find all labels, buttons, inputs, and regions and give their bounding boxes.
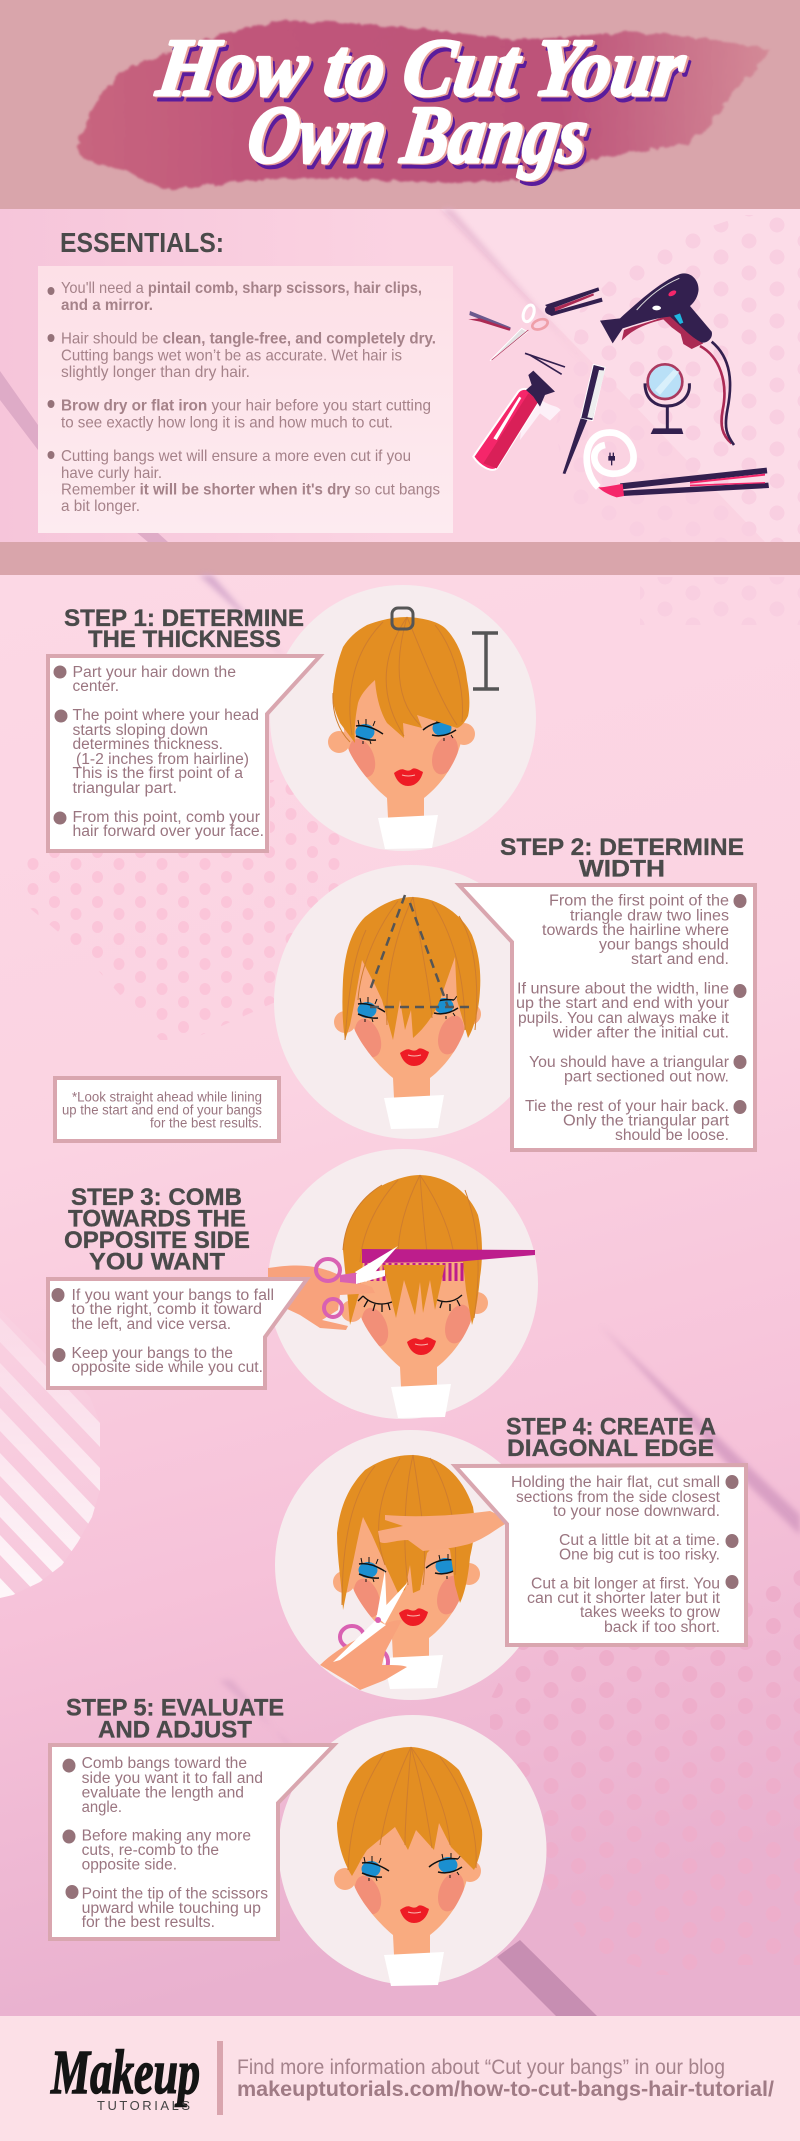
heading: step 3: YOU WANT bbox=[89, 1249, 225, 1276]
note: look straight ahead: up the start and end of your bangs bbox=[62, 1102, 262, 1118]
illustration: face, holding hand and scissors bbox=[320, 1455, 505, 1690]
bullet: hair condition: slightly longer than dry hair. bbox=[61, 364, 250, 381]
heading: step 4: DIAGONAL EDGE bbox=[507, 1435, 714, 1462]
hand holding scissors bbox=[268, 1265, 375, 1330]
bullet: brow dry bbox=[48, 398, 431, 432]
callout: step 4: Holding the hair flat, cut small bbox=[511, 1474, 720, 1491]
callout: step 5: cuts, re-comb to the bbox=[82, 1842, 219, 1859]
footer text bbox=[237, 2056, 774, 2101]
heading: step 5 bbox=[66, 1695, 284, 1744]
hair cap bbox=[343, 1175, 482, 1325]
panel: essentials list bbox=[38, 266, 453, 533]
heading: step 2: STEP 2: DETERMINE bbox=[500, 834, 744, 861]
callout: step 1: center. bbox=[72, 678, 119, 695]
callout: step 5: upward while touching up bbox=[82, 1900, 261, 1917]
callout: step 4: Cut a bit longer at first. You bbox=[531, 1575, 720, 1592]
callout: step 1: Part your hair down the bbox=[72, 664, 236, 681]
heading: step 1: STEP 1: DETERMINE bbox=[64, 605, 304, 632]
bullet: curly hair: a bit longer. bbox=[61, 498, 140, 515]
icon: flat iron bbox=[598, 468, 769, 497]
heading: step 1: THE THICKNESS bbox=[88, 626, 281, 653]
callout: step 1 bbox=[48, 656, 320, 851]
callout: step 4: to your nose downward. bbox=[553, 1503, 720, 1520]
heading: step 5: AND ADJUST bbox=[98, 1717, 252, 1744]
bullet: tools needed: and a mirror. bbox=[61, 297, 153, 314]
callout: step 1: determines thickness. bbox=[72, 736, 223, 753]
backdrop circle bbox=[268, 1149, 538, 1419]
bullet: brow dry: Brow dry or flat iron your hair before you start cutting bbox=[61, 398, 431, 414]
callout: step 2: part sectioned out now. bbox=[564, 1069, 729, 1086]
note: look straight ahead: *Look straight ahead while lining bbox=[72, 1090, 262, 1104]
callout: step 2: You should have a triangular bbox=[529, 1054, 729, 1071]
heading: essentials: ESSENTIALS: bbox=[60, 227, 224, 258]
footer text: Find more information about “Cut your bangs” in our blog bbox=[237, 2056, 725, 2079]
callout: step 4 bbox=[455, 1465, 746, 1645]
heading: step 4 bbox=[506, 1414, 716, 1462]
backdrop circle bbox=[270, 585, 536, 851]
callout: step 1: hair forward over your face. bbox=[72, 823, 264, 840]
callout: step 3: If you want your bangs to fall bbox=[72, 1287, 274, 1304]
step 1 bbox=[48, 585, 536, 851]
heading: step 3: OPPOSITE SIDE bbox=[64, 1227, 250, 1254]
icon: flat hair clip bbox=[545, 287, 603, 316]
icon: small clip bbox=[525, 353, 565, 374]
callout: step 2: your bangs should bbox=[599, 937, 729, 954]
heading: step 4: STEP 4: CREATE A bbox=[506, 1414, 716, 1440]
logo: makeup tutorials bbox=[50, 2039, 200, 2113]
callout: step 1: starts sloping down bbox=[72, 722, 208, 739]
bullet: hair condition: Cutting bangs wet won’t be as accurate. Wet hair is bbox=[61, 348, 402, 364]
front bangs bbox=[383, 1265, 445, 1318]
icon: large hair clip bbox=[468, 311, 511, 331]
icon: hand mirror bbox=[645, 364, 689, 434]
bullet: hair condition bbox=[48, 330, 436, 381]
icon: spray bottle bbox=[473, 371, 561, 470]
callout: step 5 bbox=[50, 1745, 334, 1939]
step 5 bbox=[50, 1695, 546, 1986]
title text: Own Bangs bbox=[243, 89, 593, 180]
callout: step 5: side you want it to fall and bbox=[82, 1770, 263, 1787]
callout: step 2: should be loose. bbox=[615, 1127, 729, 1144]
logo: makeup tutorials: TUTORIALS bbox=[97, 2098, 190, 2113]
illustration: finished bangs bbox=[334, 1747, 482, 1986]
panel: steps background bbox=[0, 575, 800, 2016]
heading: step 5: STEP 5: EVALUATE bbox=[66, 1695, 284, 1722]
callout: step 4: One big cut is too risky. bbox=[559, 1546, 720, 1564]
bullet: brow dry: to see exactly how long it is and how much to cut. bbox=[61, 414, 393, 432]
divider bar bbox=[217, 2041, 223, 2115]
callout: step 5: Comb bangs toward the bbox=[82, 1755, 247, 1772]
icon: crown marker bbox=[392, 608, 413, 629]
heading: step 1 bbox=[64, 605, 304, 653]
closed eyes bbox=[358, 1295, 462, 1312]
callout: step 4: can cut it shorter later but it bbox=[527, 1590, 721, 1607]
callout: step 2: towards the hairline where bbox=[542, 922, 729, 939]
callout: step 3: opposite side while you cut. bbox=[72, 1359, 263, 1376]
heading: step 2 bbox=[500, 834, 744, 882]
callout: step 4: back if too short. bbox=[604, 1619, 720, 1636]
heading: step 3: STEP 3: COMB bbox=[71, 1184, 242, 1211]
callout: step 2: triangle draw two lines bbox=[570, 908, 729, 924]
footer bbox=[0, 2016, 800, 2141]
icons: hair tools bbox=[468, 273, 769, 497]
callout: step 2 bbox=[459, 885, 755, 1150]
icon: cord coil and plug bbox=[587, 432, 634, 487]
callout: step 1: This is the first point of a bbox=[72, 765, 243, 782]
illustration: face with triangular part bbox=[334, 895, 481, 1129]
callout: step 5: for the best results. bbox=[82, 1914, 215, 1931]
brush stroke behind title bbox=[76, 21, 770, 189]
backdrop circle bbox=[278, 1715, 546, 1985]
callout: step 5: angle. bbox=[82, 1799, 122, 1816]
backdrop circle bbox=[275, 1430, 547, 1700]
icon: tail comb bbox=[563, 364, 605, 474]
comb bbox=[362, 1249, 535, 1281]
callout: step 1: The point where your head bbox=[72, 707, 259, 724]
scissors bbox=[316, 1246, 398, 1317]
heading: step 3 bbox=[64, 1184, 250, 1276]
bullet: curly hair: Cutting bangs wet will ensure a more even cut if you bbox=[61, 448, 411, 465]
icon: scissors bbox=[490, 303, 549, 361]
callout: step 5: evaluate the length and bbox=[82, 1785, 244, 1802]
heading: step 3: TOWARDS THE bbox=[68, 1205, 246, 1232]
note: look straight ahead: for the best results. bbox=[150, 1116, 262, 1130]
icon: hair dryer bbox=[600, 273, 734, 445]
dashed triangle guide bbox=[370, 895, 470, 1007]
note: look straight ahead bbox=[55, 1078, 279, 1141]
bullet: curly hair bbox=[48, 448, 440, 515]
callout: step 3 bbox=[48, 1279, 307, 1388]
panel: essentials background bbox=[0, 209, 800, 542]
title text: How to Cut Your bbox=[152, 22, 691, 113]
step 2 bbox=[55, 834, 755, 1150]
bullet: tools needed bbox=[48, 280, 422, 314]
backdrop circle bbox=[274, 865, 548, 1139]
logo: makeup tutorials: Makeup bbox=[50, 2039, 200, 2107]
callout: step 2: If unsure about the width, line bbox=[517, 981, 729, 998]
callout: step 5: Before making any more bbox=[82, 1828, 251, 1844]
callout: step 5: Point the tip of the scissors bbox=[82, 1886, 268, 1902]
callout: step 2: wider after the initial cut. bbox=[552, 1025, 729, 1042]
callout: step 3: the left, and vice versa. bbox=[72, 1316, 231, 1333]
bullet: hair condition: Hair should be clean, tangle-free, and completely dry. bbox=[61, 330, 436, 348]
cutting hand and scissors bbox=[320, 1570, 408, 1690]
decorative stripes bbox=[0, 1318, 100, 1598]
step 3 bbox=[48, 1149, 538, 1419]
callout: step 2: up the start and end with your bbox=[516, 995, 729, 1012]
bullet: curly hair: Remember it will be shorter when it's dry so cut bangs bbox=[61, 482, 440, 498]
callout: step 4: takes weeks to grow bbox=[580, 1604, 721, 1621]
holding hand bbox=[378, 1511, 505, 1551]
callout: step 2: Only the triangular part bbox=[563, 1113, 730, 1130]
callout: step 2: From the first point of the bbox=[549, 893, 729, 910]
heading: step 2: WIDTH bbox=[579, 856, 665, 882]
title text bbox=[152, 22, 691, 180]
callout: step 1: From this point, comb your bbox=[72, 809, 260, 826]
title band bbox=[0, 0, 800, 209]
callout: step 3: to the right, comb it toward bbox=[72, 1301, 262, 1318]
footer text: makeuptutorials.com/how-to-cut-bangs-hair-tutorial/ bbox=[237, 2078, 774, 2101]
callout: step 2: start and end. bbox=[631, 951, 729, 968]
bullet: tools needed: You'll need a pintail comb, sharp scissors, hair clips, bbox=[61, 280, 422, 297]
band under essentials bbox=[0, 542, 800, 575]
callout: step 4: Cut a little bit at a time. bbox=[559, 1532, 720, 1549]
callout: step 3: Keep your bangs to the bbox=[72, 1345, 233, 1362]
callout: step 5: opposite side. bbox=[82, 1856, 177, 1874]
callout: step 2: pupils. You can always make it bbox=[518, 1010, 730, 1027]
bullet: curly hair: have curly hair. bbox=[61, 465, 162, 482]
callout: step 1: (1-2 inches from hairline) bbox=[76, 751, 249, 768]
callout: step 1: triangular part. bbox=[72, 780, 177, 797]
illustration: face with parted hair bbox=[328, 617, 475, 849]
step 4 bbox=[275, 1414, 746, 1700]
callout: step 2: Tie the rest of your hair back. bbox=[525, 1098, 729, 1115]
callout: step 4: sections from the side closest bbox=[516, 1489, 721, 1506]
illustration: face, comb and scissors bbox=[268, 1175, 535, 1418]
icon: thickness bracket bbox=[472, 633, 499, 689]
